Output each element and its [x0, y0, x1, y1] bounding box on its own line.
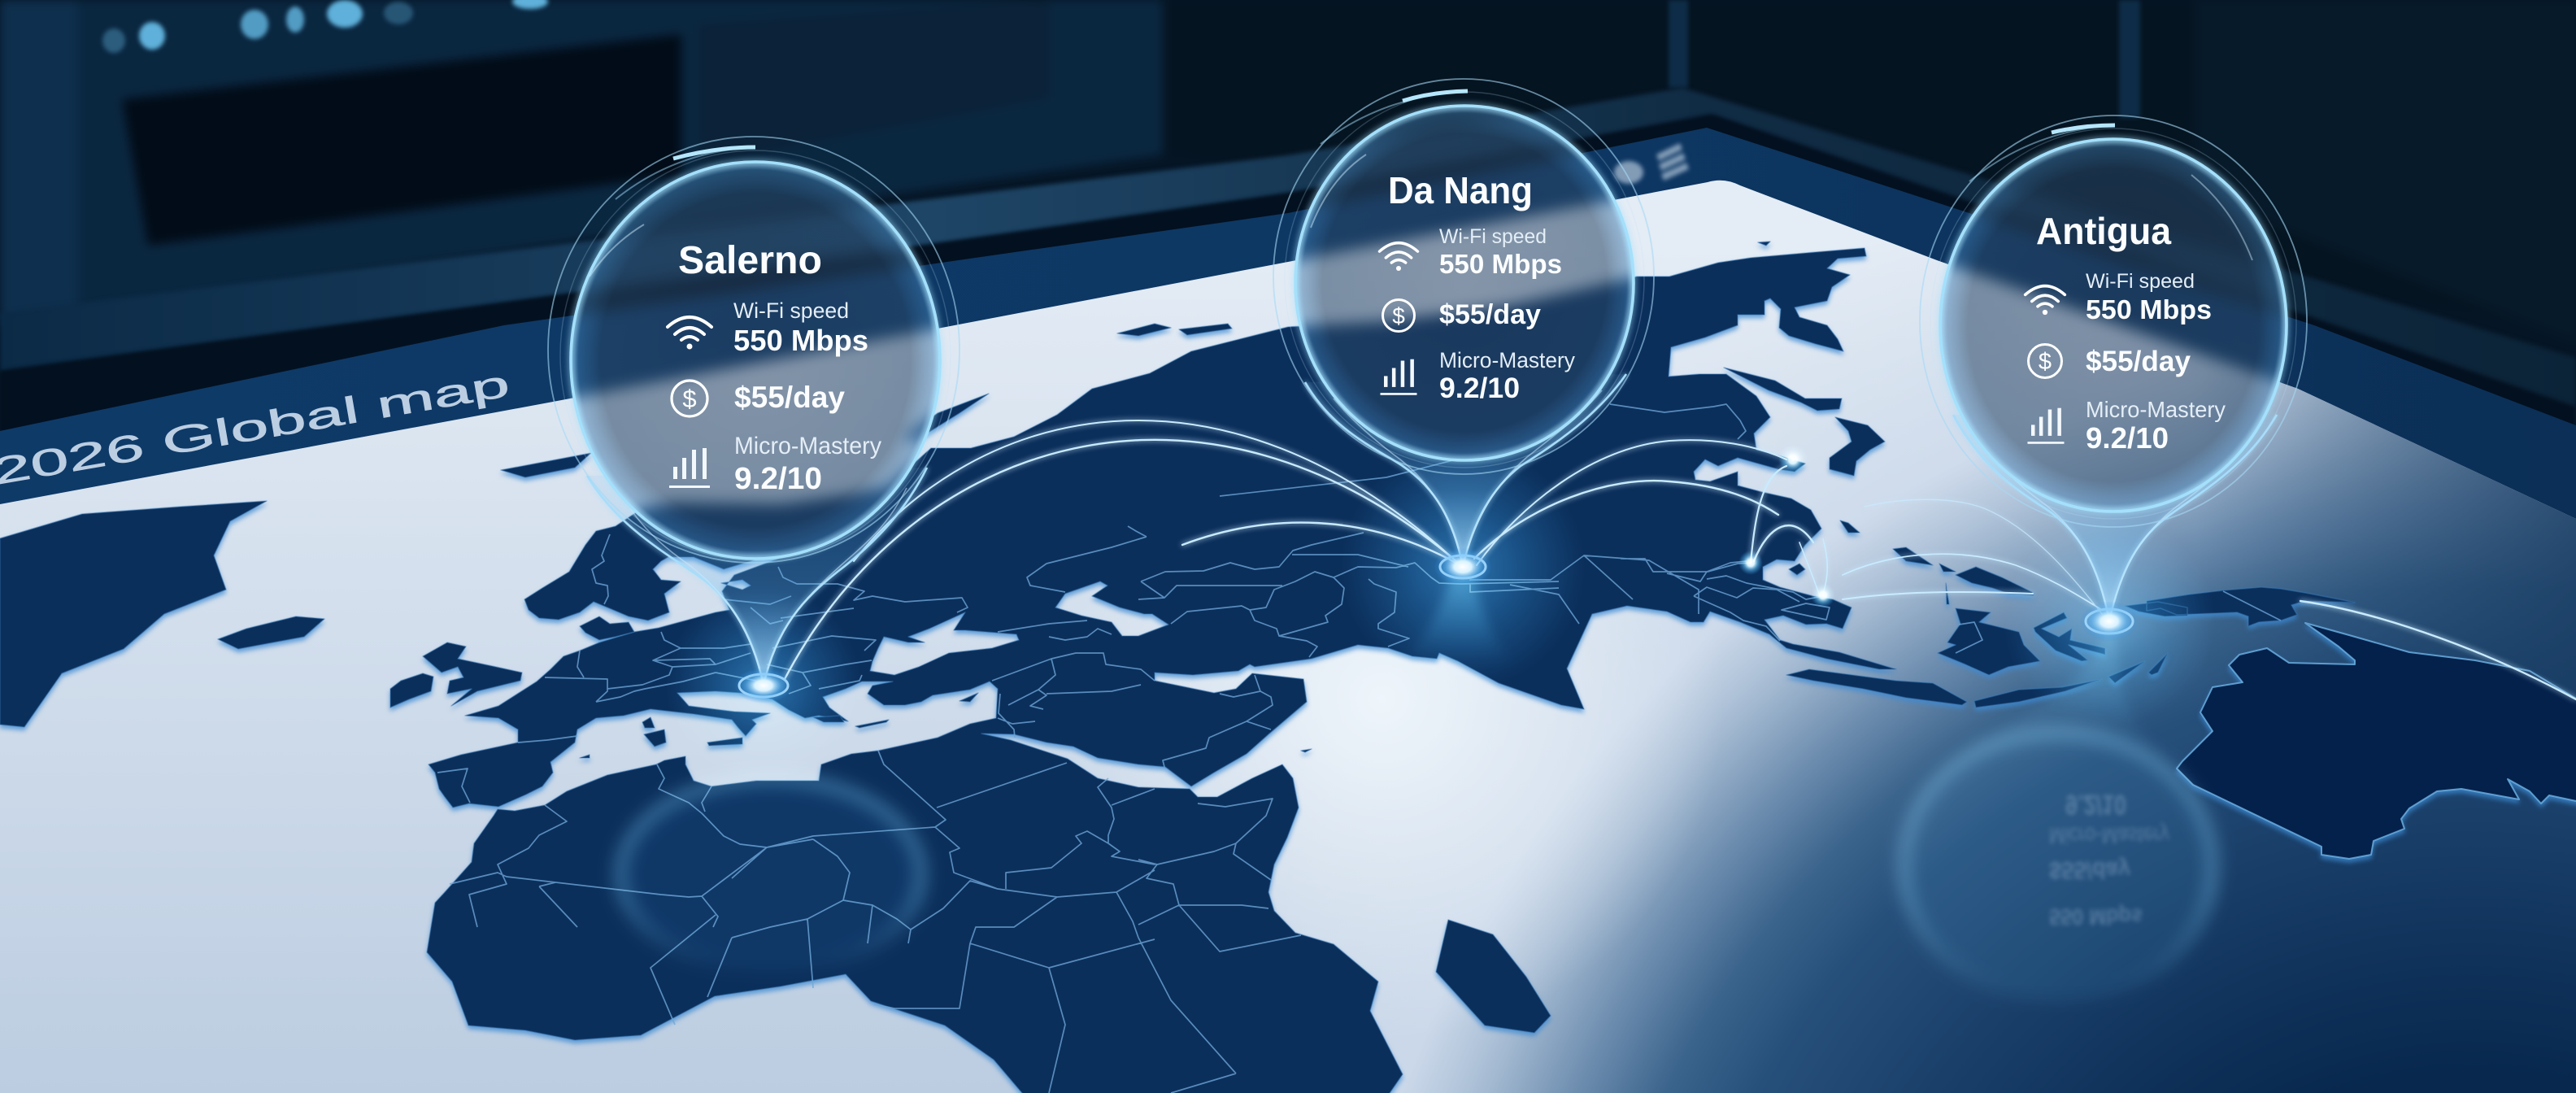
Wi-Fi speed metric: Wi-Fi speed: [1439, 225, 1547, 248]
Wi-Fi speed metric: Wi-Fi speed: [733, 298, 849, 323]
icon: dollar: $: [682, 385, 697, 413]
continents: [0, 242, 2576, 1093]
bubble rings: [548, 137, 959, 563]
daily cost metric: $55/day: [2086, 346, 2191, 377]
city name: Antigua: [2036, 210, 2171, 252]
icon: wifi: [1380, 243, 1417, 271]
Wi-Fi speed metric: Wi-Fi speed: [2086, 270, 2195, 293]
icon: bar chart: [1381, 359, 1416, 395]
daily cost metric: $55/day: [1439, 299, 1541, 330]
pin base marker: [1434, 547, 1492, 586]
main landmass: Eurasia and Africa with inland seas: [427, 248, 1896, 1093]
table blue frame: [0, 128, 2576, 537]
Wi-Fi speed metric: [733, 298, 868, 357]
Australia: [2177, 623, 2576, 859]
reflection: Antigua bubble with mirrored text: [1904, 626, 2213, 1000]
tablet menu icon: [1614, 143, 1689, 184]
country borders: [437, 404, 2281, 1093]
frosted bubble body: [572, 163, 938, 558]
light beam under Da Nang pin: [1400, 573, 1512, 663]
city name: Da Nang: [1388, 169, 1533, 211]
background cables: [1669, 0, 2140, 118]
pin base marker: [2080, 601, 2139, 642]
Micro-Mastery metric: 9.2/10: [734, 462, 822, 496]
reflection: Salerno bubble on map: [620, 778, 921, 970]
frosted bubble body: [1296, 107, 1633, 459]
table black gap: [0, 114, 2576, 455]
pin: Da Nang: [1273, 78, 1655, 584]
icon: bar chart: [669, 448, 710, 488]
Micro-Mastery metric: Micro-Mastery: [1439, 348, 1575, 372]
pin base marker: [734, 668, 793, 703]
bubble rings: [1273, 79, 1654, 474]
reflection: Antigua bubble with mirrored text: Micro-Mastery: [2049, 823, 2169, 848]
Wi-Fi speed metric: [1439, 225, 1562, 279]
Micro-Mastery metric: [734, 433, 881, 496]
pin tail: [1953, 415, 2277, 621]
table bezel: [0, 88, 2576, 431]
Micro-Mastery metric: Micro-Mastery: [2086, 397, 2226, 422]
Micro-Mastery metric: [2086, 397, 2226, 455]
icon: dollar: $: [2039, 349, 2052, 375]
city name: Salerno: [678, 239, 822, 282]
Wi-Fi speed metric: [2086, 270, 2212, 324]
pin tail: [1305, 374, 1626, 567]
status lights on background equipment: [102, 0, 548, 53]
icon: dollar: [1382, 299, 1415, 332]
reflection: Antigua bubble with mirrored text: 550 Mbps: [2049, 904, 2143, 930]
icon: dollar: [2028, 345, 2062, 377]
Micro-Mastery metric: Micro-Mastery: [734, 433, 881, 459]
Wi-Fi speed metric: 550 Mbps: [1439, 249, 1562, 279]
Wi-Fi speed metric: 550 Mbps: [733, 324, 868, 357]
minor city nodes: [1738, 445, 1835, 607]
icon: bar chart: [2028, 408, 2064, 444]
icon: wifi: [2026, 286, 2065, 315]
pin: Salerno: [547, 136, 960, 703]
icon: dollar: [672, 381, 707, 416]
islands and other landmasses: [0, 242, 2355, 1033]
halos around map pins: [666, 445, 2215, 783]
connection arcs between cities: [785, 420, 2576, 699]
icon: dollar: $: [1392, 303, 1405, 329]
Micro-Mastery metric: [1439, 348, 1575, 404]
daily cost metric: $55/day: [734, 381, 845, 414]
bubble rings: [1920, 115, 2307, 527]
reflection: Antigua bubble with mirrored text: 9.2/10: [2065, 789, 2126, 820]
frosted bubble body: [1942, 140, 2285, 510]
icon: wifi: [668, 317, 711, 350]
Micro-Mastery metric: 9.2/10: [1439, 372, 1520, 404]
pin tail: [587, 468, 927, 686]
Wi-Fi speed metric: 550 Mbps: [2086, 294, 2212, 324]
Micro-Mastery metric: 9.2/10: [2086, 421, 2169, 455]
pin: Antigua: [1919, 115, 2308, 639]
reflection: Antigua bubble with mirrored text: $55/day: [2049, 856, 2130, 883]
